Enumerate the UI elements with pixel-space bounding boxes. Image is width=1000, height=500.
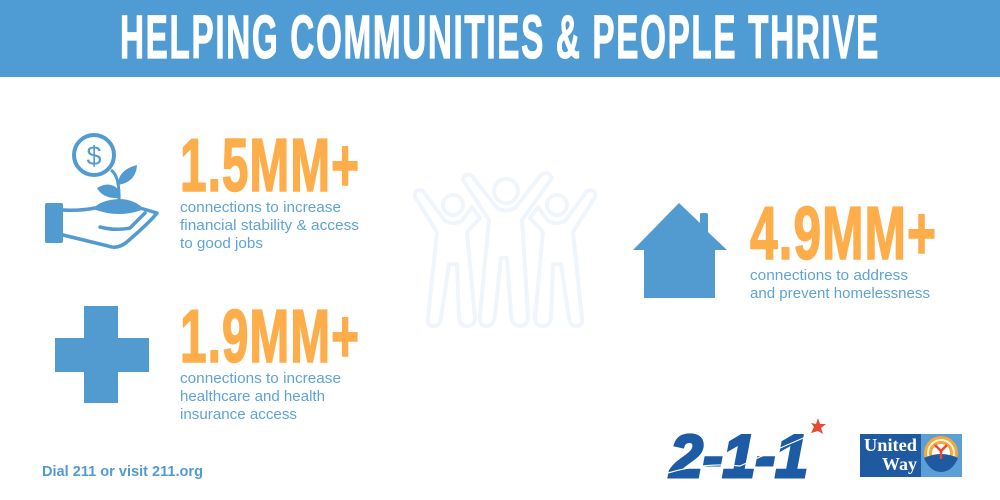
description: healthcare: healthcare and health <box>180 388 325 405</box>
description: healthcare: insurance access <box>180 406 297 423</box>
logo: United Way <box>860 434 962 477</box>
description: homelessness: and prevent homelessness <box>750 285 930 302</box>
logo: United Way: Way <box>882 454 917 474</box>
description: financial stability: to good jobs <box>180 235 263 252</box>
stat: 1.5MM+: 1.5MM+ <box>180 123 360 207</box>
icon: hand holding plant and coin: $ <box>86 141 102 171</box>
icon: three people with raised arms (watermark) <box>415 173 595 326</box>
description: homelessness <box>750 267 930 302</box>
header banner <box>0 0 1000 77</box>
panel: financial stability <box>45 123 360 252</box>
logo: United Way: United <box>864 435 917 455</box>
icon: medical cross <box>55 306 149 403</box>
icon: hand holding plant and coin <box>45 135 157 247</box>
description: financial stability <box>180 199 359 252</box>
description: homelessness: connections to address <box>750 267 908 284</box>
panel: homelessness <box>633 191 937 302</box>
description: financial stability: financial stability & access <box>180 217 359 234</box>
stat: 1.9MM+: 1.9MM+ <box>180 294 360 378</box>
logo: 2-1-1: 2-1-1 <box>669 423 808 490</box>
description: financial stability: connections to increase <box>180 199 341 216</box>
call to action: Dial 211 or visit 211.org <box>42 464 203 480</box>
icon: house <box>633 203 727 298</box>
description: healthcare: connections to increase <box>180 370 341 387</box>
panel: healthcare <box>55 294 360 423</box>
description: healthcare <box>180 370 341 423</box>
